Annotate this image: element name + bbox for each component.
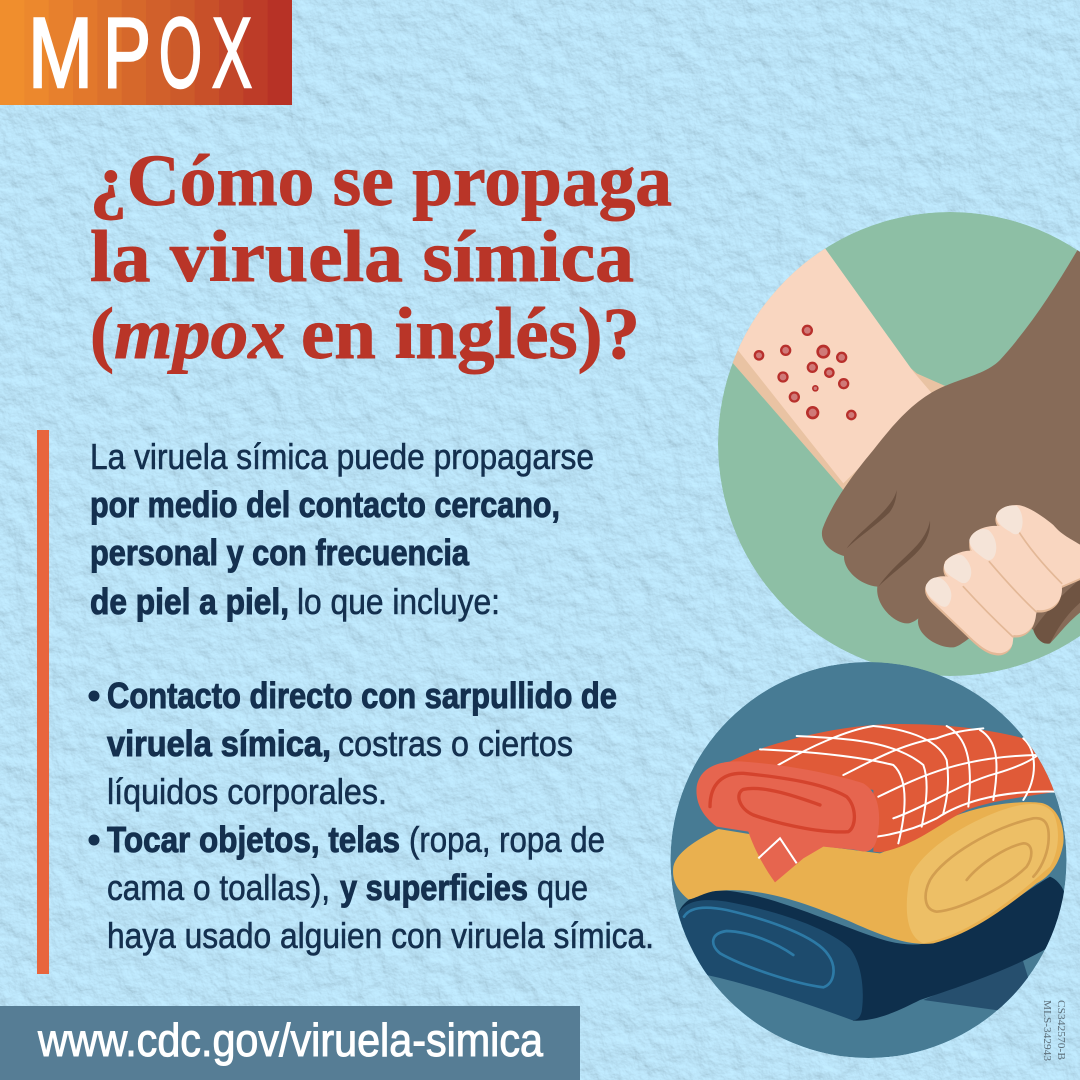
text block: introduction: lo que incluye: [297, 581, 500, 622]
title: ( [90, 293, 114, 374]
banner: MPOX: X [212, 0, 252, 108]
bullet: direct contact: viruela símica, [107, 723, 331, 764]
bullet: touching objects: haya usado alguien con viruela símica. [107, 915, 654, 956]
title: ¿Cómo se propaga [90, 140, 672, 221]
banner: MPOX [0, 0, 292, 108]
illustration: folded towels on blue circle [670, 662, 1066, 1058]
text block: introduction: personal y con frecuencia [90, 532, 470, 573]
shadow under towels [924, 961, 1028, 1010]
banner: MPOX: O [159, 0, 202, 108]
title [90, 140, 672, 374]
light fingers [925, 505, 1080, 655]
bullet: touching objects: (ropa, ropa de [409, 819, 605, 860]
footer: website link [0, 1006, 580, 1080]
arm with rash [732, 248, 945, 490]
bullet: direct contact: Contacto directo con sarpullido de [107, 675, 617, 716]
accent bar [37, 430, 49, 974]
red plaid towel [696, 724, 1057, 882]
bullet: touching objects [88, 819, 654, 956]
text block: introduction: por medio del contacto cercano, [90, 484, 560, 525]
illustration: hands and rash on green circle [687, 212, 1080, 676]
title: mpox [114, 293, 286, 374]
navy towel [678, 877, 1065, 1021]
footer: website link: www.cdc.gov/viruela-simica [37, 1014, 543, 1066]
bullet: touching objects: Tocar objetos, telas [107, 819, 400, 860]
text block: introduction: La viruela símica puede propagarse [90, 436, 594, 477]
title: en inglés)? [301, 293, 640, 374]
bullet: touching objects: que [537, 867, 588, 908]
text block: introduction: de piel a piel, [90, 581, 289, 622]
print codes: MLS-342943 [1041, 1000, 1053, 1062]
dark hand [822, 240, 1080, 647]
banner: MPOX: M [28, 0, 93, 108]
banner: MPOX: P [103, 0, 151, 108]
yellow towel [673, 802, 1064, 944]
print codes [1041, 1000, 1067, 1062]
bullet: touching objects: cama o toallas), [107, 867, 330, 908]
print codes: CS342570-B [1055, 1000, 1067, 1060]
title: la viruela símica [90, 216, 634, 297]
bullet: direct contact: líquidos corporales. [107, 771, 387, 812]
bullet: touching objects: y superficies [340, 867, 528, 908]
text block: introduction [90, 436, 594, 622]
bullet: direct contact [88, 675, 617, 812]
bullet: direct contact: costras o ciertos [338, 723, 573, 764]
rash spots [754, 325, 857, 420]
